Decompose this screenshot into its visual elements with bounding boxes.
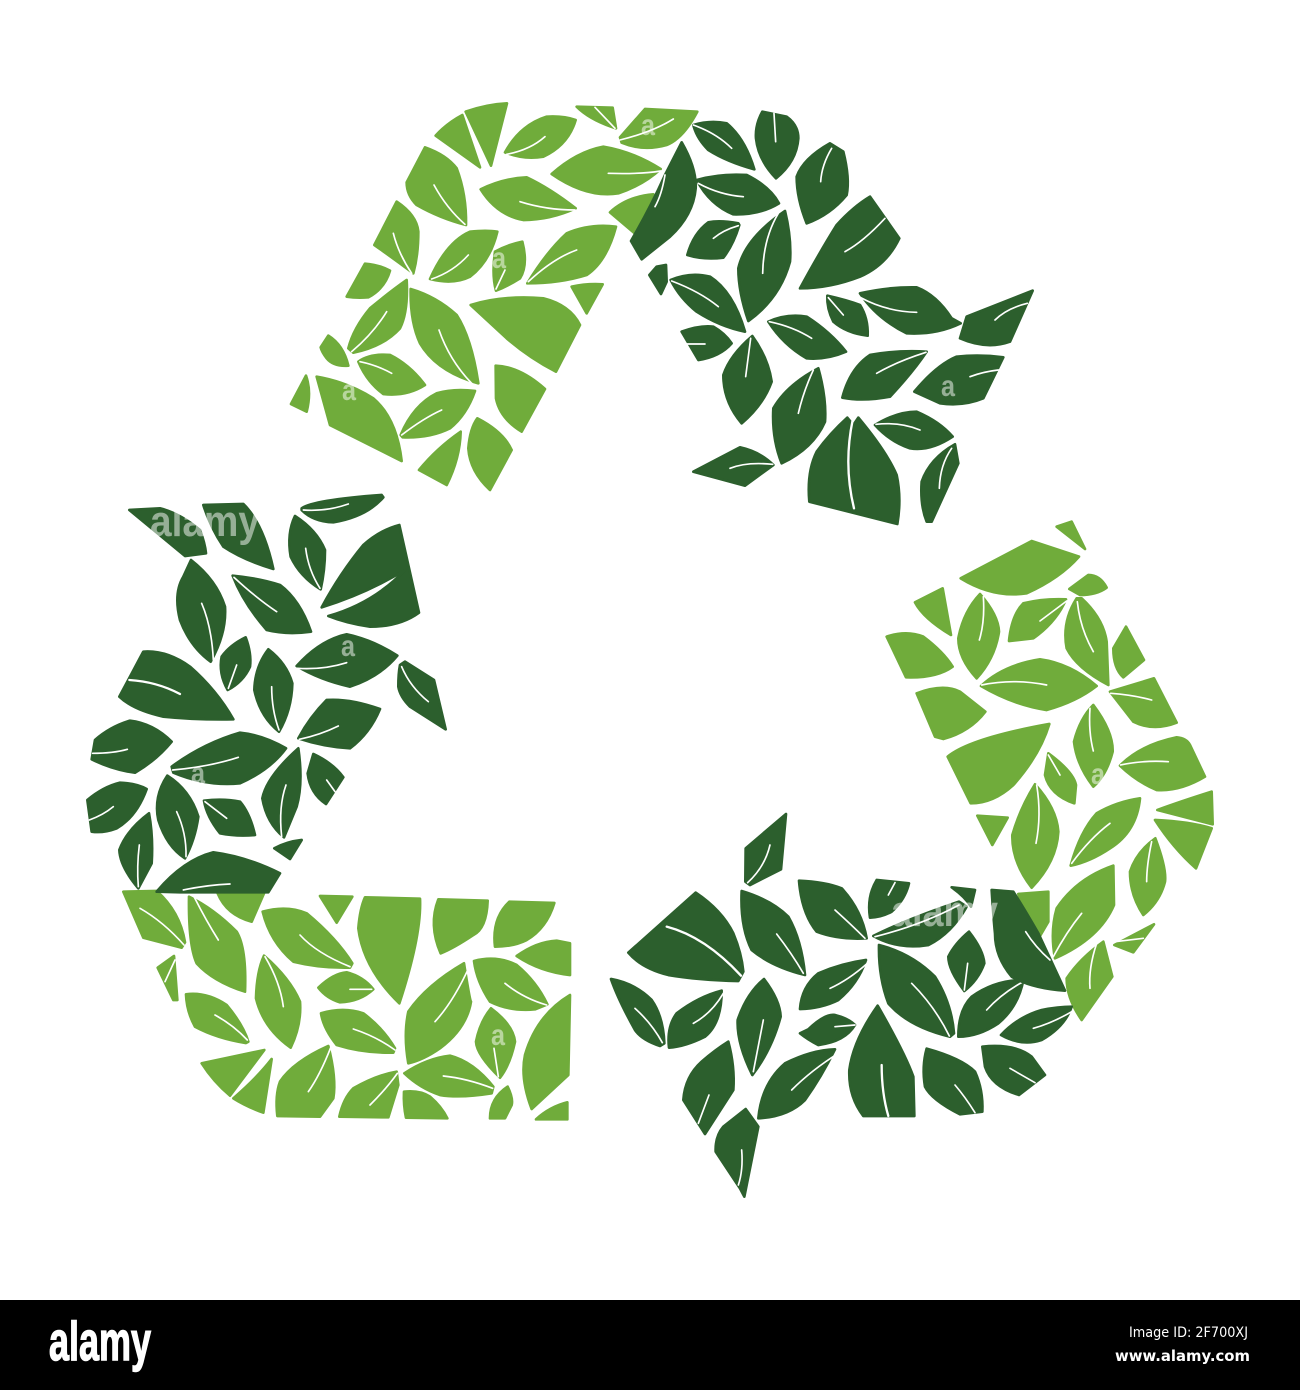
leaf	[628, 893, 743, 981]
leaf	[552, 147, 661, 194]
leaf	[490, 1087, 512, 1118]
leaf	[958, 594, 999, 678]
leaf	[277, 1046, 334, 1117]
leaf	[620, 109, 697, 148]
leaf	[254, 649, 292, 732]
leaf	[1110, 678, 1177, 727]
leaf	[398, 662, 446, 729]
watermark letters over the leaves: a	[492, 242, 506, 275]
leaf	[291, 376, 309, 412]
leaf	[577, 107, 616, 128]
leaf	[1074, 705, 1113, 787]
leaf	[468, 418, 512, 490]
leaf	[958, 980, 1023, 1037]
leaf	[960, 291, 1033, 345]
leaf	[1045, 753, 1076, 803]
leaf	[256, 956, 300, 1048]
leaf	[517, 941, 570, 975]
leaf	[948, 724, 1049, 803]
watermark letters over the leaves	[150, 109, 1105, 1052]
leaf	[434, 899, 488, 953]
leaf	[523, 995, 570, 1109]
leaf	[1009, 599, 1067, 641]
leaf	[952, 887, 975, 907]
leaf	[1067, 942, 1112, 1020]
leaf	[1130, 838, 1165, 915]
leaf	[873, 902, 967, 946]
leaf	[961, 541, 1079, 594]
leaf	[917, 688, 985, 739]
image id: Image ID: 2F700XJ	[1129, 1325, 1248, 1341]
leaf	[992, 890, 1065, 991]
leaf	[298, 700, 380, 748]
watermark letters over the leaves: alamy	[150, 497, 260, 546]
leaf	[186, 994, 248, 1043]
leaf	[611, 979, 664, 1046]
leaf	[172, 733, 286, 784]
leaf	[649, 265, 667, 294]
leaf	[157, 776, 198, 858]
leaf	[887, 633, 953, 677]
leaf	[317, 377, 402, 461]
leaf	[610, 194, 653, 235]
watermark letters over the leaves: alamy	[891, 887, 998, 936]
leaf	[738, 211, 790, 321]
watermark letters over the leaves: a	[191, 757, 205, 790]
leaf	[860, 287, 961, 334]
leaf	[536, 1102, 567, 1119]
leaf	[123, 891, 185, 948]
watermark letters over the leaves: a	[641, 109, 655, 142]
panel: right light green arrow band	[887, 522, 1213, 1020]
leaf	[572, 284, 603, 313]
leaf	[481, 177, 576, 220]
leaf	[496, 366, 545, 432]
leaf	[842, 351, 927, 399]
leaf	[741, 891, 805, 975]
leaf	[274, 840, 302, 859]
leaf	[745, 814, 786, 885]
leaf	[129, 508, 206, 556]
leaf	[358, 897, 420, 1003]
leaf	[1001, 1007, 1072, 1042]
leaf	[157, 852, 280, 892]
leaf	[977, 816, 1008, 845]
leaf	[411, 289, 478, 385]
leaf	[404, 1091, 447, 1118]
leaf	[693, 122, 754, 169]
leaf	[218, 893, 264, 922]
leaf	[1157, 792, 1213, 824]
leaf	[800, 197, 899, 288]
leaf	[374, 202, 418, 273]
leaf	[358, 355, 425, 394]
leaf	[189, 897, 245, 992]
leaf	[981, 659, 1097, 710]
leaf	[797, 143, 848, 223]
leaf	[914, 356, 1003, 404]
leaf	[430, 231, 497, 282]
footer logo: alamy	[49, 1310, 151, 1372]
leaf	[320, 896, 352, 923]
leaf	[474, 959, 547, 1010]
leaf	[687, 221, 739, 258]
leaf	[682, 326, 732, 360]
leaf	[693, 447, 773, 486]
leaf	[697, 175, 779, 214]
leaf	[1120, 737, 1205, 790]
leaf	[297, 634, 397, 687]
leaf	[494, 902, 554, 947]
leaf	[671, 275, 745, 332]
leaf	[308, 754, 343, 804]
leaf	[768, 316, 846, 359]
leaf	[233, 576, 311, 633]
leaf	[683, 1042, 734, 1134]
leaf	[800, 1015, 855, 1045]
leaf	[322, 525, 419, 627]
leaf	[669, 991, 723, 1048]
leaf	[1065, 598, 1108, 685]
website: www.alamy.com	[1115, 1347, 1250, 1365]
leaf	[339, 1072, 398, 1117]
leaf	[773, 368, 825, 463]
leaf	[119, 813, 152, 888]
leaf	[263, 909, 352, 968]
leaf	[1018, 892, 1048, 942]
leaf	[401, 390, 475, 437]
leaf	[406, 963, 471, 1063]
footer bar	[0, 1300, 1300, 1390]
leaf	[158, 956, 177, 1000]
panel: top dark green arrow head	[631, 112, 1033, 524]
panel: top light green arrow band	[291, 103, 697, 490]
leaf	[921, 444, 958, 522]
leaf	[527, 226, 616, 283]
leaf	[1114, 924, 1154, 952]
panel: bottom right dark green arrow head	[611, 814, 1072, 1197]
leaf	[177, 560, 225, 662]
leaf	[758, 1049, 838, 1118]
leaf	[348, 280, 407, 353]
leaf	[800, 960, 867, 1009]
watermark letters over the leaves: a	[491, 1019, 505, 1052]
leaf	[476, 1008, 515, 1078]
leaf	[982, 1046, 1045, 1095]
leaf	[915, 588, 951, 635]
leaf	[203, 504, 273, 569]
leaf	[1071, 798, 1140, 866]
leaf	[1053, 866, 1114, 958]
leaf	[756, 112, 798, 178]
leaf	[875, 412, 953, 449]
leaf	[1057, 522, 1085, 549]
leaf	[321, 336, 348, 366]
leaf	[436, 115, 480, 167]
leaf	[1012, 784, 1058, 888]
watermark letters over the leaves: a	[341, 630, 355, 663]
leaf	[262, 748, 300, 837]
leaf	[924, 1049, 982, 1114]
leaf	[799, 881, 867, 939]
leaf	[631, 142, 696, 259]
leaf	[321, 1010, 395, 1053]
leaf	[318, 972, 373, 1002]
leaf	[827, 296, 868, 336]
leaf	[419, 432, 461, 485]
leaf	[494, 242, 525, 291]
leaf	[92, 721, 172, 773]
leaf	[948, 932, 984, 991]
leaf	[1155, 820, 1212, 868]
watermark letters over the leaves: a	[1091, 758, 1105, 791]
leaf	[849, 1006, 914, 1116]
leaf	[233, 1059, 272, 1113]
watermark letters over the leaves: a	[941, 370, 955, 403]
leaf	[1113, 627, 1144, 677]
panel: left dark green arrow head	[87, 495, 446, 892]
leaf	[879, 945, 954, 1037]
watermark letters over the leaves: a	[342, 374, 356, 407]
leaf	[221, 637, 250, 690]
leaf	[466, 103, 507, 166]
leaf	[869, 880, 909, 918]
leaf	[204, 800, 255, 836]
leaf	[289, 516, 325, 589]
panel: bottom light green arrow band	[123, 891, 570, 1119]
leaf	[738, 979, 781, 1075]
leaf	[716, 1109, 758, 1197]
leaf	[202, 1050, 264, 1096]
leaf	[723, 336, 772, 423]
leaf	[347, 264, 390, 298]
leaf	[407, 147, 466, 225]
leaf	[809, 418, 899, 524]
leaf	[471, 297, 580, 372]
leaf	[119, 652, 233, 719]
leaf	[404, 1056, 493, 1096]
leaf	[1069, 575, 1107, 595]
leaf	[87, 783, 147, 832]
leaf	[505, 116, 576, 158]
leaf	[302, 495, 383, 522]
